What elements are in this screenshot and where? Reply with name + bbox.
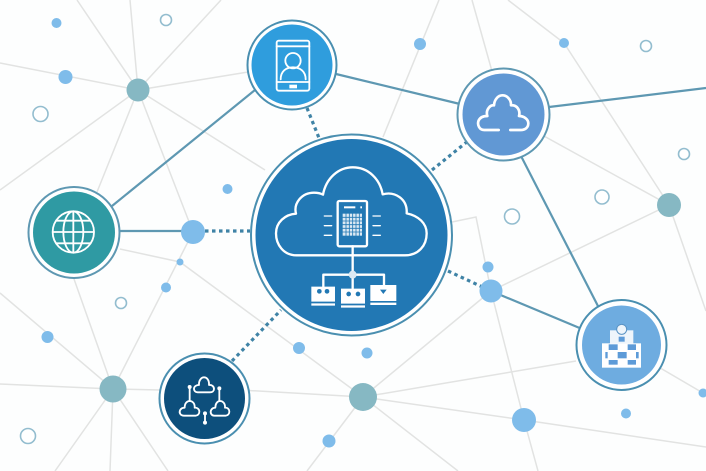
hierarchy node (160, 354, 250, 444)
icon: blocks (602, 324, 641, 368)
icon: cloud (478, 95, 528, 130)
central cloud hub (251, 134, 452, 336)
icon: cloud with server and devices (276, 167, 427, 308)
icon: smartphone with user (277, 41, 309, 91)
icon: globe (53, 211, 94, 253)
dotted connectors (205, 108, 491, 361)
icon: connected clouds (180, 377, 229, 425)
checker block node (576, 300, 666, 390)
connector lines (112, 74, 706, 329)
globe node (28, 187, 120, 278)
cloud node (458, 68, 550, 160)
phone node (248, 20, 336, 110)
